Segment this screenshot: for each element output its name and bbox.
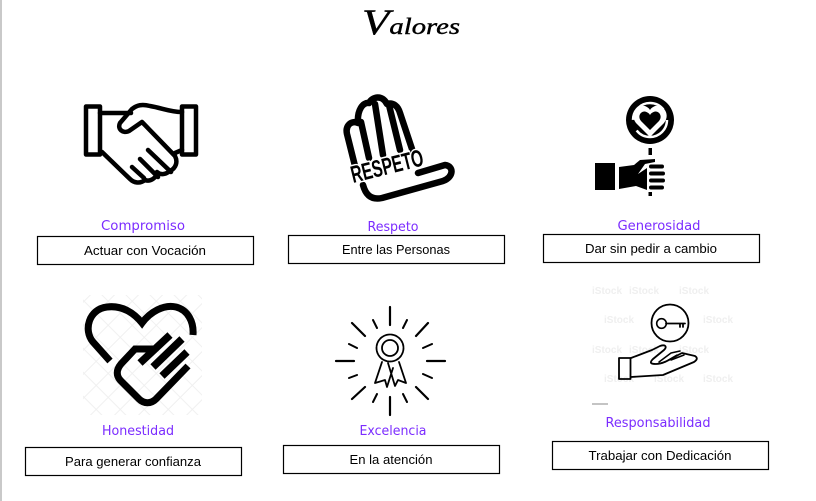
caption box [552,442,768,470]
watermarks: iStock [592,345,622,356]
watermarks: iStock [703,374,733,385]
watermarks: iStock [679,345,709,356]
watermarks: iStock [592,286,622,297]
watermarks: iStock [604,374,634,385]
icon: hand with respeto [347,97,452,198]
panel: generosidad [544,96,760,262]
label: Compromiso [101,219,185,234]
label: Excelencia [360,424,426,439]
caption box [288,236,504,264]
title: Valores [362,2,460,42]
panel: honestidad [26,295,242,476]
caption box: Trabajar con Dedicación [588,448,732,463]
caption box [544,234,760,262]
icon: hand holding heart sign [595,96,674,196]
caption box: Para generar confianza [65,454,202,469]
panel: excelencia [284,307,500,474]
icon: award rosette with rays [336,307,445,415]
caption box: Entre las Personas [342,242,450,257]
caption box: Actuar con Vocación [84,243,206,258]
caption box [38,236,254,264]
label: Respeto [368,220,419,235]
icon: handshake [86,105,196,183]
watermarks: iStock [629,345,659,356]
panel: respeto [288,97,504,263]
watermarks: iStock [629,286,659,297]
watermarks: iStock [679,286,709,297]
label: Generosidad [618,219,700,234]
label: Responsabilidad [606,416,710,431]
icon: hand with respeto: RESPETO [348,145,426,189]
watermarks: iStock [703,315,733,326]
label: Honestidad [102,424,174,439]
caption box [284,446,500,474]
panel: responsabilidad [552,286,768,470]
icon: heart and hand [83,295,202,415]
watermarks [592,286,733,405]
panel: compromiso [38,105,254,264]
caption box [26,448,242,476]
icon: hand holding key [619,304,697,379]
caption box: Dar sin pedir a cambio [585,241,717,256]
caption box: En la atención [350,452,432,467]
watermarks: iStock [654,374,684,385]
watermarks: iStock [604,315,634,326]
